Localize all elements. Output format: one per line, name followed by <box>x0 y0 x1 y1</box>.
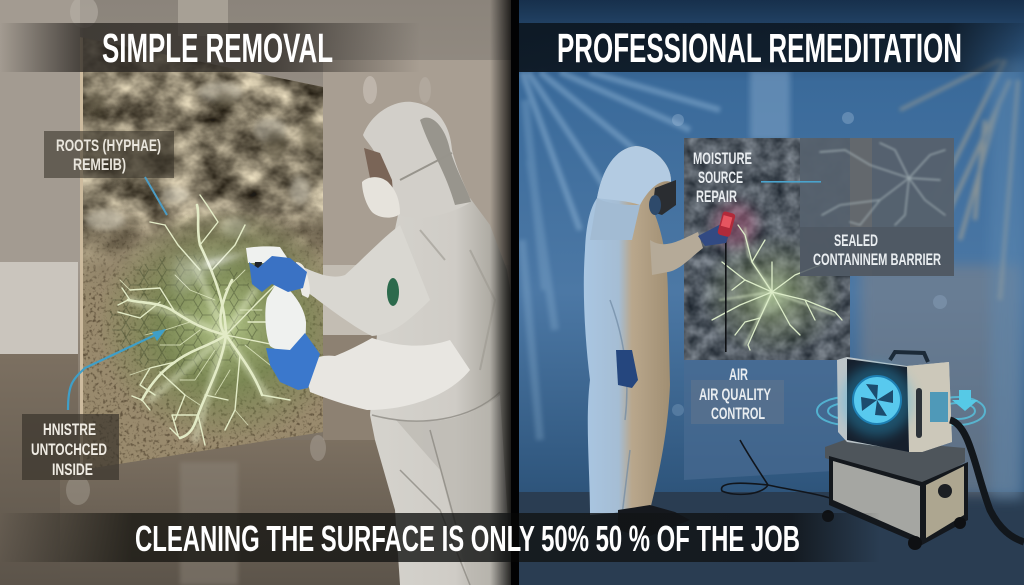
arm <box>650 232 703 275</box>
callout: air quality control: CONTROL <box>711 404 765 423</box>
spray bottle <box>246 246 306 351</box>
panel: professional remediation <box>519 0 1024 585</box>
arrow: moisture callout line <box>761 181 821 183</box>
worker: white suit <box>296 102 512 585</box>
heading band: simple removal: SIMPLE REMOVAL <box>102 25 333 71</box>
callout: roots (hyphae): REMEIB) <box>73 155 126 174</box>
callout: roots (hyphae) <box>44 131 174 178</box>
face mask <box>362 177 400 218</box>
callout: untouched inside: INSIDE <box>52 460 93 479</box>
callout: roots (hyphae): ROOTS (HYPHAE) <box>56 136 161 155</box>
lower arm <box>306 338 470 410</box>
control screen <box>930 392 948 422</box>
callout: sealed containment barrier <box>800 227 954 276</box>
front face <box>847 359 909 452</box>
callout: moisture source repair <box>693 149 752 206</box>
callout: air quality control <box>691 365 784 424</box>
callout: air quality control: AIR <box>729 365 748 384</box>
handle <box>890 352 928 362</box>
callout: moisture source repair: SOURCE <box>698 168 743 187</box>
cuff <box>296 262 310 298</box>
air scrubber machine <box>817 352 1024 550</box>
shoes <box>618 505 690 538</box>
arrow: roots callout line <box>145 177 167 215</box>
callout: sealed containment barrier: CONTANINEM BARRIER <box>813 250 941 269</box>
right vignette <box>492 0 511 585</box>
sealed section with faint roots <box>800 138 954 227</box>
worker: blue-lit suit <box>584 146 703 538</box>
housing <box>837 357 952 452</box>
respirator <box>649 180 676 215</box>
moldy wall section <box>684 138 850 360</box>
power cord <box>722 440 830 498</box>
bright roots <box>712 225 842 350</box>
callout: untouched inside: HNISTRE <box>43 420 96 439</box>
chest badge <box>387 278 399 306</box>
glowing fan <box>841 365 913 437</box>
glove at side <box>616 350 638 388</box>
mycelium root network <box>118 195 300 445</box>
callout: moisture source repair: MOISTURE <box>693 149 752 168</box>
background: drywall wall <box>0 0 512 585</box>
upper arm <box>300 225 430 336</box>
face <box>364 148 393 188</box>
air arrow <box>952 390 978 411</box>
callout: untouched inside <box>22 414 119 480</box>
hood <box>363 102 471 218</box>
hose <box>950 420 1024 542</box>
air swirls <box>817 397 985 425</box>
arrow: untouched inside <box>68 329 166 410</box>
side vent <box>916 388 922 438</box>
panel: simple removal <box>0 0 512 585</box>
heading band: simple removal <box>0 23 420 72</box>
cart <box>825 440 965 482</box>
divider between panels <box>511 0 519 585</box>
callout: untouched inside: UNTOCHCED <box>31 440 107 459</box>
moisture meter <box>698 211 736 352</box>
bottom banner <box>0 513 880 562</box>
mold board <box>80 37 323 470</box>
spray mist <box>175 252 246 295</box>
blue glove: lower hand <box>266 333 320 390</box>
background: plastic sheeting <box>519 0 1024 585</box>
callout: sealed containment barrier: SEALED <box>834 231 878 250</box>
blue glove: upper hand <box>249 256 307 292</box>
callout: moisture source repair: REPAIR <box>696 187 737 206</box>
callout: air quality control: AIR QUALITY <box>699 385 771 404</box>
